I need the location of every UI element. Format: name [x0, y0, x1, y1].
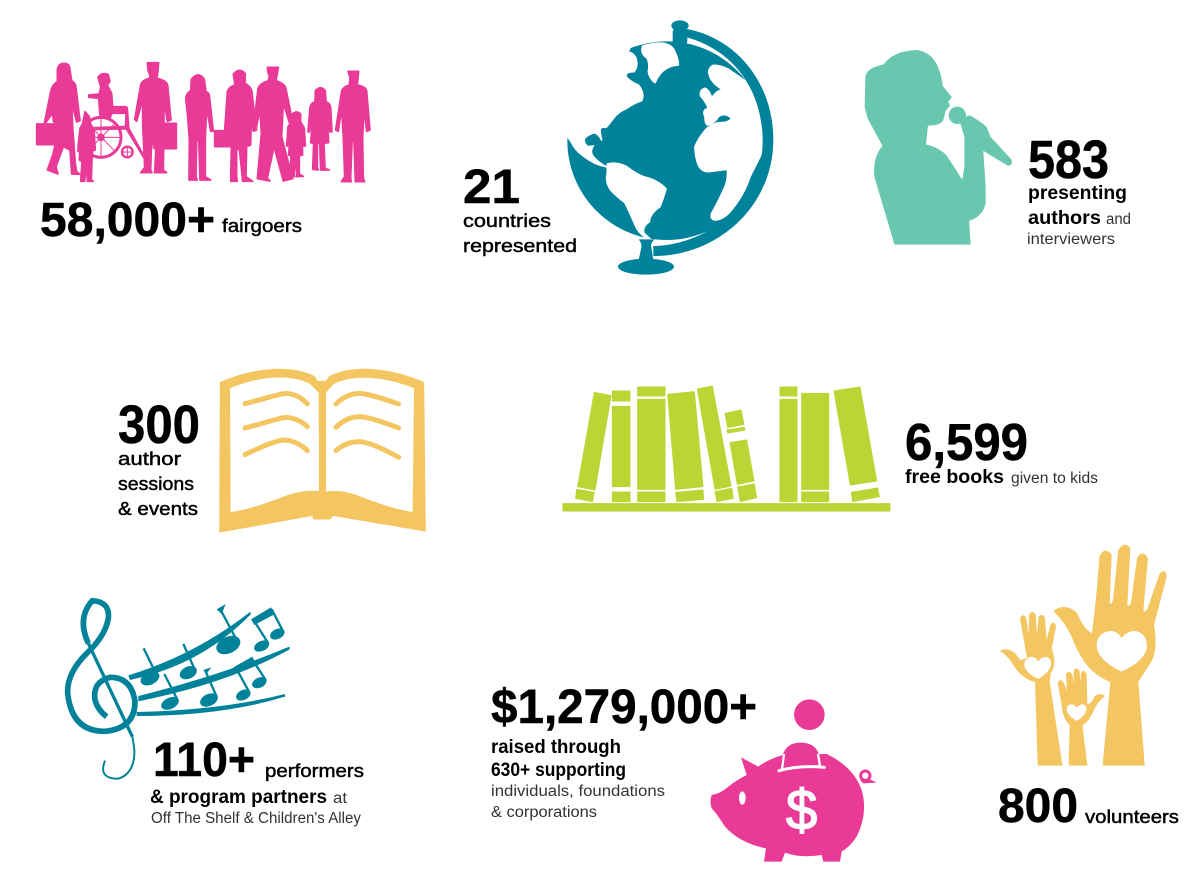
- stat: 583 presenting authors and interviewers: and: [1106, 211, 1131, 228]
- panel: countries: [463, 20, 773, 275]
- stat: $1,279,000+ raised: & corporations: [491, 804, 597, 821]
- icon: open book: [220, 370, 425, 532]
- panel: presenting authors: [865, 51, 1131, 248]
- stat: 583 presenting authors and interviewers: [1027, 130, 1131, 248]
- stat: 58,000+ fairgoers: 58,000+: [40, 194, 215, 247]
- stat: 583 presenting authors and interviewers: interviewers: [1027, 231, 1115, 248]
- stat: 300 author sessions & events: author: [118, 448, 181, 469]
- stat: 110+ performers and program partners: 110+: [153, 734, 255, 787]
- stat: 583 presenting authors and interviewers: presenting: [1028, 183, 1127, 204]
- stat: 800 volunteers: 800: [998, 780, 1078, 833]
- stat: 300 author sessions & events: sessions: [118, 473, 194, 494]
- icon: crowd of people: [37, 63, 370, 182]
- stat: 6,599 free books given to kids: [905, 414, 1098, 488]
- stat: 583 presenting authors and interviewers: authors: [1028, 208, 1101, 229]
- icon: piggy bank with coin: $: [786, 779, 817, 842]
- stat: $1,279,000+ raised: 630+ supporting: [491, 760, 626, 781]
- stat: 110+ performers and program partners: performers: [265, 760, 364, 781]
- stat: 110+ performers and program partners: at: [333, 790, 348, 807]
- stat: 110+ performers and program partners: Off The Shelf & Children's Alley: [151, 810, 361, 827]
- icon: raised hands with hearts: [1001, 545, 1166, 765]
- stat: 21 countries represented: 21: [463, 161, 520, 214]
- stat: $1,279,000+ raised: raised through: [491, 737, 621, 758]
- stat: 58,000+ fairgoers: [40, 194, 302, 247]
- stat: 21 countries represented: represented: [463, 235, 577, 256]
- panel: free books: [563, 386, 1098, 511]
- panel: author sessions: [118, 370, 425, 532]
- stat: $1,279,000+ raised: [491, 681, 757, 821]
- panel: funds raised: [491, 681, 877, 862]
- panel: volunteers: [998, 545, 1179, 833]
- panel: fairgoers: [37, 63, 370, 247]
- stat: $1,279,000+ raised: individuals, foundations: [491, 783, 665, 800]
- stat: 800 volunteers: [998, 780, 1179, 833]
- stat: 6,599 free books given to kids: free books: [905, 467, 1004, 488]
- stat: 58,000+ fairgoers: fairgoers: [222, 215, 302, 236]
- icon: treble clef and music notes: [68, 601, 290, 779]
- icon: books on shelf: [563, 386, 890, 511]
- stat: 583 presenting authors and interviewers: 583: [1028, 130, 1109, 190]
- stat: 110+ performers and program partners: & program partners: [150, 787, 327, 808]
- stat: 300 author sessions & events: [118, 395, 200, 519]
- stat: 300 author sessions & events: & events: [118, 498, 198, 519]
- stat: 300 author sessions & events: 300: [118, 395, 200, 455]
- icon: globe: [565, 20, 773, 275]
- panel: performers: [68, 601, 364, 827]
- stat: 21 countries represented: [463, 161, 577, 256]
- stat: 800 volunteers: volunteers: [1085, 806, 1179, 827]
- stat: 21 countries represented: countries: [463, 210, 551, 231]
- stat: 6,599 free books given to kids: 6,599: [905, 414, 1028, 472]
- stat: $1,279,000+ raised: $1,279,000+: [491, 681, 757, 734]
- icon: speaker with microphone: [865, 51, 1011, 244]
- stat: 110+ performers and program partners: [150, 734, 364, 827]
- stat: 6,599 free books given to kids: given to kids: [1011, 470, 1098, 487]
- icon: piggy bank with coin: [710, 699, 877, 862]
